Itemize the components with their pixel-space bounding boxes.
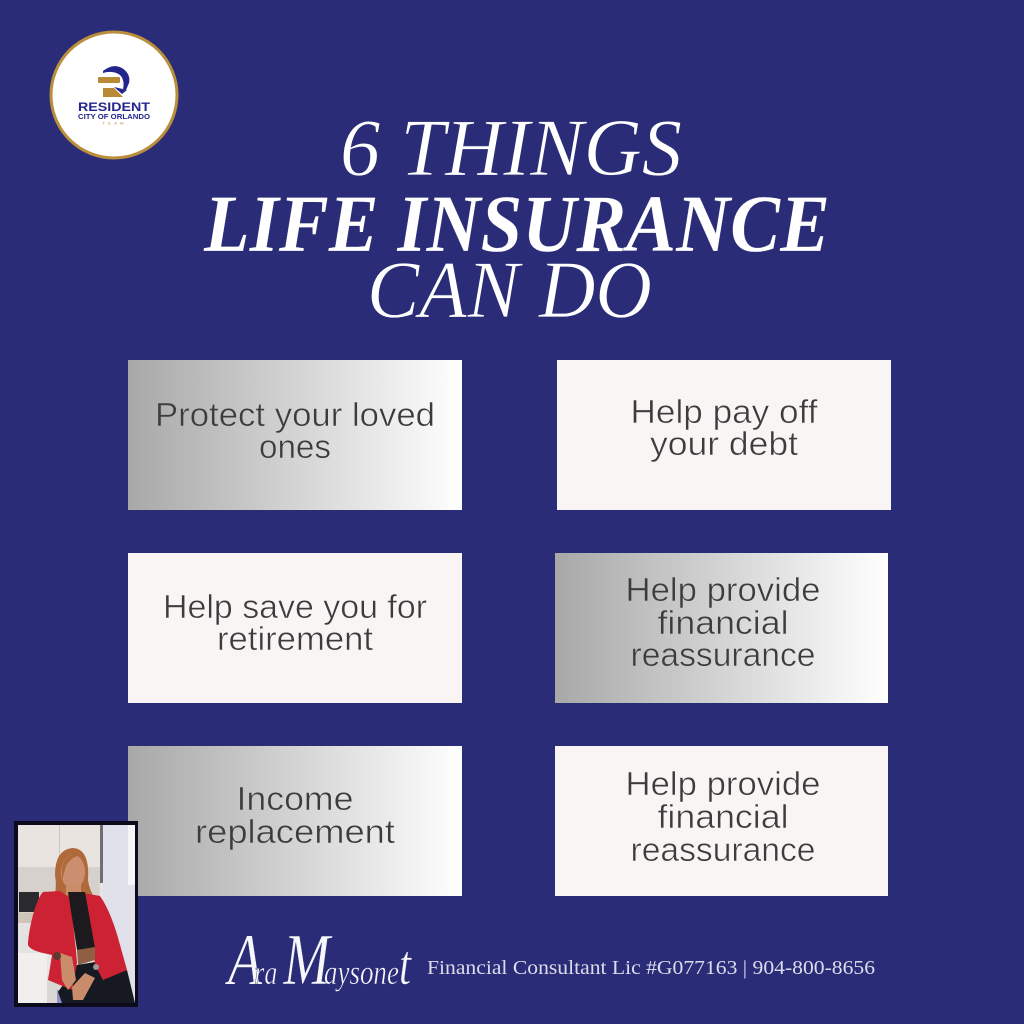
panel: help save you for retirement — [128, 553, 462, 703]
portrait photo — [14, 821, 138, 1007]
panel: protect your loved ones — [128, 360, 462, 510]
hands and accessories — [60, 953, 76, 990]
panel: help provide financial reassurance (gradient) — [555, 553, 888, 703]
logo team: TEAM — [102, 120, 124, 126]
footer contact line: Financial Consultant Lic #G077163 | 904-800-8656 — [427, 957, 875, 979]
icon: R monogram — [98, 66, 129, 97]
chair and trousers — [57, 990, 62, 1003]
title: CAN DO — [367, 244, 652, 335]
panel: protect your loved ones: ones — [259, 428, 331, 465]
panel: income replacement: Income — [236, 780, 354, 817]
panel: protect your loved ones: Protect your loved — [155, 396, 435, 433]
panel: help provide financial reassurance (gradient): reassurance — [630, 636, 816, 673]
logo wordmark: RESIDENT — [78, 100, 151, 114]
panel: help provide financial reassurance (gradient): Help provide — [626, 571, 820, 608]
panel: help pay off your debt — [557, 360, 891, 510]
logo subline: CITY OF ORLANDO — [78, 112, 150, 121]
panel: income replacement — [128, 746, 462, 896]
panel: income replacement: replacement — [195, 813, 395, 850]
title: 6 THINGS — [340, 102, 682, 193]
signature: AraMaysonet — [225, 920, 413, 1001]
black top and belt — [68, 892, 95, 950]
panel: help pay off your debt: your debt — [650, 425, 798, 462]
hair — [55, 848, 93, 898]
panel: help provide financial reassurance (white) — [555, 746, 888, 896]
panel: help provide financial reassurance (gradient): financial — [658, 604, 788, 641]
panel: help save you for retirement: Help save you for — [163, 588, 427, 625]
red jacket — [28, 891, 77, 990]
panel: help provide financial reassurance (white): financial — [658, 798, 788, 835]
title: LIFE INSURANCE — [203, 178, 830, 269]
logo badge — [51, 32, 177, 158]
panel: help provide financial reassurance (white): reassurance — [630, 831, 816, 868]
panel: help provide financial reassurance (white): Help provide — [626, 765, 820, 802]
panel: help pay off your debt: Help pay off — [630, 393, 818, 430]
title — [203, 102, 830, 335]
panel: help save you for retirement: retirement — [217, 620, 373, 657]
